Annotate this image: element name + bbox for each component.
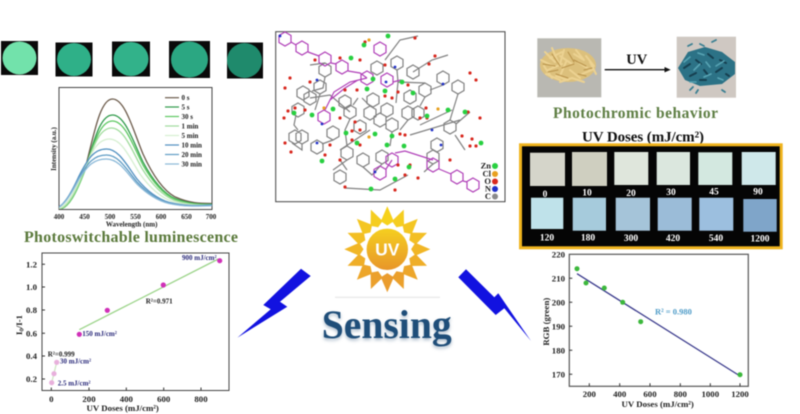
axis labels: 0.8 xyxy=(26,305,38,315)
swatch labels: 10 xyxy=(582,188,592,198)
spectra legend xyxy=(165,94,202,168)
axis labels: 1200 xyxy=(731,389,749,399)
annotations: R²=0.971 xyxy=(146,298,173,306)
chart: RGB green vs UV dose xyxy=(541,249,749,409)
axis labels: 210 xyxy=(552,273,566,283)
atom legend: N xyxy=(485,184,492,194)
swatch labels: 180 xyxy=(581,234,595,244)
spectra legend: 10 min xyxy=(182,142,202,150)
annotations: 900 mJ/cm² xyxy=(182,254,217,262)
spectra axes labels: 400 xyxy=(54,213,65,221)
heading: Sensing: Sensing xyxy=(322,302,452,347)
spectra axes labels: 450 xyxy=(79,213,90,221)
axis labels: 800 xyxy=(674,389,687,399)
spectra axes labels: 700 xyxy=(206,213,217,221)
arrow: UV exposure xyxy=(605,52,671,72)
atom legend: C xyxy=(485,191,491,201)
chart: luminescence vs UV dose xyxy=(14,253,229,413)
swatch labels xyxy=(540,188,770,244)
swatch labels: 420 xyxy=(666,234,680,244)
annotations: 2.5 mJ/cm² xyxy=(58,380,91,388)
axis labels: 0 xyxy=(18,328,26,332)
zinc atoms xyxy=(292,34,483,191)
panel: luminescence swatches xyxy=(1,41,263,78)
swatch labels: 0 xyxy=(543,190,548,200)
heading: photoswitchable luminescence: Photoswitchable luminescence xyxy=(24,229,238,246)
photo: blue crystals after UV xyxy=(677,37,736,98)
axis labels: 200 xyxy=(82,394,96,404)
spectra legend: 0 s xyxy=(182,94,190,102)
photo: yellow crystals before UV xyxy=(537,38,601,97)
spectra legend: 30 min xyxy=(182,160,202,168)
axis labels: 200 xyxy=(583,389,596,399)
fit line xyxy=(577,274,740,376)
data points xyxy=(49,258,222,385)
swatch labels: 120 xyxy=(540,234,554,244)
oxygen atoms xyxy=(282,36,482,192)
chart: emission spectra xyxy=(50,88,217,228)
arrow: UV exposure: UV xyxy=(626,52,648,68)
axis labels xyxy=(14,259,208,413)
swatch 1 xyxy=(1,41,38,75)
swatch labels: 90 xyxy=(753,188,763,198)
atom legend: Zn xyxy=(481,160,491,170)
purple linker rings xyxy=(279,32,479,192)
swatch 3 xyxy=(112,42,150,76)
spectra axes labels: 600 xyxy=(156,213,167,221)
icon: UV sun xyxy=(344,206,430,292)
axis labels xyxy=(541,249,749,409)
gray ligand rings xyxy=(289,56,464,184)
axis labels: 190 xyxy=(552,321,566,331)
axis labels: /I-1 xyxy=(14,315,24,329)
gray bonds xyxy=(292,36,470,190)
UV label: UV xyxy=(375,240,400,260)
axis labels: 0.6 xyxy=(26,328,38,338)
swatch labels: 1200 xyxy=(750,234,770,244)
spectra axes labels: 550 xyxy=(130,213,141,221)
axis labels: 220 xyxy=(552,249,566,259)
atom legend: O xyxy=(484,176,491,186)
axis labels: UV Doses (mJ/cm²) xyxy=(622,399,694,409)
spectra legend: 5 s xyxy=(182,104,190,112)
spectra legend: 5 min xyxy=(182,132,199,140)
spectra axes labels: Intensity (a.u.) xyxy=(50,126,58,171)
panel: UV dose colour swatches xyxy=(520,145,781,248)
R squared label: R² = 0.980 xyxy=(655,307,692,317)
heading: photochromic behavior: Photochromic behavior xyxy=(553,105,718,122)
axis labels: 1000 xyxy=(702,389,720,399)
axis labels: 600 xyxy=(157,394,171,404)
axis labels: 800 xyxy=(194,394,208,404)
fit lines xyxy=(52,259,218,383)
axis labels: 0 xyxy=(49,394,54,404)
axis labels: I xyxy=(14,332,24,335)
icon: right lightning bolt xyxy=(458,269,531,341)
axis labels: 0.4 xyxy=(26,351,38,361)
swatch 4 xyxy=(169,41,210,78)
spectra axes labels: 500 xyxy=(105,213,116,221)
axis labels: 0.2 xyxy=(26,374,38,384)
swatch labels: 300 xyxy=(624,234,638,244)
spectra legend: 1 min xyxy=(182,122,199,130)
spectra legend: 20 min xyxy=(182,151,202,159)
sun rays xyxy=(344,206,430,292)
icon: left lightning bolt xyxy=(237,269,311,338)
swatch labels: 30 xyxy=(666,188,676,198)
axis labels: 170 xyxy=(552,369,566,379)
axis labels: 200 xyxy=(552,297,566,307)
annotations: 150 mJ/cm² xyxy=(82,330,117,338)
axis labels: 1.2 xyxy=(26,259,38,269)
swatch labels: 45 xyxy=(709,188,719,198)
annotations: 30 mJ/cm² xyxy=(60,358,91,366)
annotations xyxy=(48,254,217,388)
annotations: R²=0.999 xyxy=(48,351,75,359)
data points xyxy=(574,266,742,377)
spectra legend: 30 s xyxy=(182,113,193,121)
axis labels: 1.0 xyxy=(26,282,38,292)
swatch 5 xyxy=(227,42,263,78)
spectra axes labels: 650 xyxy=(181,213,192,221)
panel: crystal structure xyxy=(276,32,505,202)
swatch labels: 540 xyxy=(709,234,723,244)
spectra axes labels: Wavelength (nm) xyxy=(106,220,158,228)
tick marks xyxy=(42,264,201,390)
swatch grid xyxy=(530,152,777,232)
purple linker bonds xyxy=(291,42,467,182)
atom legend xyxy=(481,160,498,201)
axis labels: RGB (green) xyxy=(541,298,551,346)
swatch 2 xyxy=(56,42,92,76)
swatch labels: 20 xyxy=(626,189,636,199)
tick marks xyxy=(569,278,740,386)
nitrogen and chlorine atoms xyxy=(279,35,444,173)
axis labels: 400 xyxy=(120,394,133,404)
axis labels: 600 xyxy=(643,389,657,399)
atom legend: Cl xyxy=(482,168,492,178)
axis labels: 400 xyxy=(613,389,627,399)
spectra curves xyxy=(53,99,214,209)
sun disc xyxy=(367,229,408,270)
axis labels: 180 xyxy=(552,345,566,355)
heading: UV doses: UV Doses (mJ/cm²) xyxy=(582,130,704,146)
spectra axes labels xyxy=(50,126,217,228)
axis labels: UV Doses (mJ/cm²) xyxy=(87,403,159,413)
